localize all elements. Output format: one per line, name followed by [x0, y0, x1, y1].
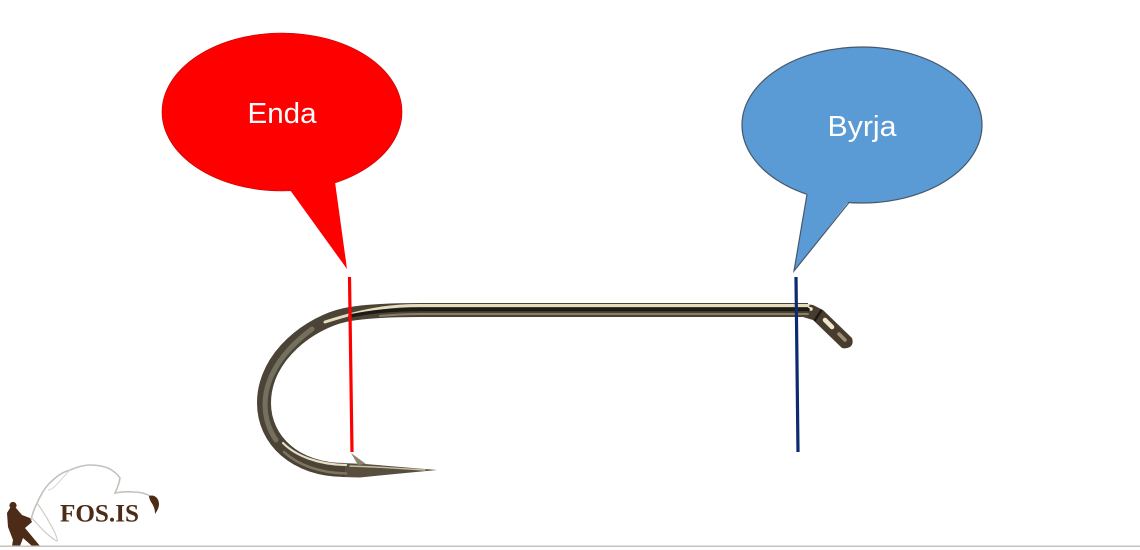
icon: fly hook — [264, 303, 853, 478]
logo text: FOS.IS — [60, 500, 139, 528]
bottom rule — [0, 546, 1140, 547]
hook eye — [798, 303, 853, 348]
callout: Enda: Enda — [248, 98, 317, 130]
marker line: end (red) — [350, 277, 352, 452]
fishing line — [31, 465, 150, 520]
fish — [149, 495, 159, 514]
angler silhouette — [7, 502, 40, 546]
callout: Enda — [162, 33, 402, 269]
callout: Byrja — [742, 47, 982, 271]
hook shank and bend — [264, 310, 808, 470]
bend highlight — [283, 443, 346, 465]
marker line: start (navy) — [796, 277, 798, 452]
logo: FOS.IS — [7, 465, 159, 546]
shank highlights — [325, 306, 808, 322]
callout: Byrja: Byrja — [828, 111, 897, 143]
hook point and barb — [342, 463, 437, 478]
